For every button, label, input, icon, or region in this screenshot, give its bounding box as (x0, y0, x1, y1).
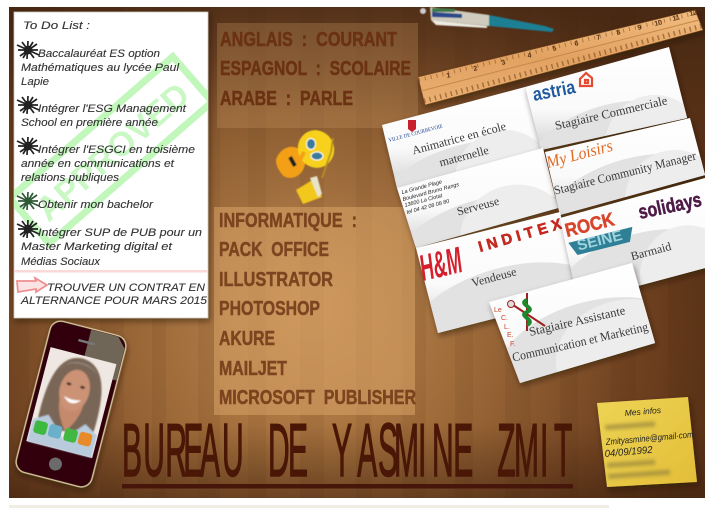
sticky note: contact info: Zmityasmine@gmail·com (604, 429, 694, 447)
item: baccalaureat: Baccalauréat ES option (38, 48, 160, 60)
logo: le clef: C. (501, 315, 508, 322)
title underline (122, 484, 573, 488)
address block: 13600 La Ciotat (404, 193, 443, 209)
card: my loisirs: Stagiaire Community Manager (553, 148, 698, 198)
item: baccalaureat: Mathématiques au lycée Paul (21, 62, 180, 74)
item: ESG: School en première année (21, 117, 158, 129)
ruler numbers: 7 (596, 34, 601, 42)
home button (48, 456, 63, 472)
item: sup de pub: Master Marketing digital et (21, 241, 173, 253)
list heading: To Do List : (23, 20, 90, 32)
panel: to do list (10, 12, 212, 318)
title (122, 409, 573, 493)
item: ESG (21, 103, 187, 129)
ruler numbers (446, 9, 698, 80)
ruler numbers: 11 (672, 14, 681, 23)
ruler numbers: 4 (527, 52, 532, 60)
title: DE (268, 409, 308, 493)
item: ESGCI (21, 144, 195, 184)
title: YASMINE (332, 409, 473, 493)
panel: languages (217, 23, 418, 128)
language: arabe: ARABE : PARLE (220, 88, 353, 110)
ruler numbers: 10 (654, 19, 663, 28)
sticky note: contact info (597, 397, 697, 487)
ruler numbers: 8 (616, 29, 621, 37)
icon: tweety usb key (276, 124, 340, 204)
card: le clef: Stagiaire Assistante (528, 303, 627, 339)
icon: ruler (418, 9, 703, 105)
skill: pack office: PACK OFFICE (219, 239, 329, 261)
card: le clef: Communication et Marketing (511, 319, 650, 365)
item: ESGCI: année en communications et (21, 158, 175, 170)
logo: h&m: H&M (416, 239, 466, 289)
card: barmaid (558, 178, 705, 291)
ruler numbers: 1 (446, 72, 451, 80)
approved stamp: APPROVED (29, 76, 197, 229)
logo: rock en seine (563, 206, 636, 256)
address block: tel 04 42 08 08 80 (406, 198, 451, 216)
ruler numbers: 3 (501, 59, 506, 67)
card: barmaid: Barmaid (629, 239, 673, 263)
ruler numbers: 6 (574, 40, 579, 48)
goal text: TROUVER UN CONTRAT EN (47, 282, 205, 294)
sticky note: contact info: 04/09/1992 (604, 445, 653, 460)
checklist star icons (17, 41, 39, 238)
approved stamp (10, 57, 212, 243)
skill heading: INFORMATIQUE : (219, 210, 357, 232)
card: serveuse: Serveuse (455, 194, 501, 219)
ruler numbers: 5 (552, 45, 557, 53)
language: anglais: ANGLAIS : COURANT (220, 29, 397, 51)
skill: photoshop: PHOTOSHOP (219, 298, 320, 320)
logo: rock en seine: ROCK (563, 209, 617, 242)
title: BUREAU (122, 409, 244, 493)
card: vendeuse (414, 212, 573, 338)
item: ESGCI: relations publiques (21, 172, 120, 184)
item: ESG: Intégrer l'ESG Management (38, 103, 187, 115)
item: bachelor: Obtenir mon bachelor (38, 199, 154, 211)
logo: my loisirs: My Loisirs (543, 136, 615, 172)
item: sup de pub: Intégrer SUP de PUB pour un (38, 227, 202, 239)
skill: illustrator: ILLUSTRATOR (219, 269, 333, 291)
skill: mailjet: MAILJET (219, 358, 287, 380)
logo: le clef: E. (507, 332, 514, 339)
title: ZMIT (497, 409, 572, 493)
address block (401, 179, 460, 216)
skill: microsoft publisher: MICROSOFT PUBLISHER (219, 387, 416, 409)
goal text: ALTERNANCE POUR MARS 2015 (20, 295, 208, 307)
item: baccalaureat: Lapie (21, 76, 49, 88)
logo: ville de courbevoie: VILLE DE COURBEVOIE (388, 123, 444, 144)
logo: rock en seine: SEINE (575, 227, 624, 254)
icon: pen (420, 7, 554, 32)
icon: smartphone with portrait (14, 319, 128, 489)
card: astria: Stagiaire Commerciale (554, 93, 669, 133)
ruler numbers: 12 (689, 9, 698, 18)
card: animatrice (381, 87, 540, 192)
card: le clef (488, 263, 658, 388)
ruler numbers: 9 (637, 24, 642, 32)
card: vendeuse: Vendeuse (470, 264, 518, 290)
card: astria (524, 47, 690, 154)
logo: le clef: L. (504, 324, 510, 331)
panel: experience cards (381, 47, 705, 388)
card: serveuse (396, 148, 559, 252)
card: animatrice: Animatrice en école (410, 119, 507, 157)
card: my loisirs (543, 118, 705, 218)
address block: Boulevard Bruno Rangs (402, 182, 460, 203)
panel: software skills (214, 207, 416, 415)
language: espagnol: ESPAGNOL : SCOLAIRE (220, 58, 411, 80)
item: ESGCI: Intégrer l'ESGCI en troisième (38, 144, 195, 156)
logo: astria: astria (531, 77, 578, 106)
logo: le clef: Le (494, 307, 502, 314)
item: sup de pub (21, 227, 202, 268)
item: baccalaureat (21, 48, 180, 88)
skill: akure: AKURE (219, 328, 275, 350)
card: animatrice: maternelle (438, 143, 490, 169)
logo: le clef (494, 293, 545, 348)
logo: le clef: F. (510, 341, 516, 348)
address block: La Grande Plage (401, 179, 443, 196)
logo: inditex: INDITEX (476, 216, 564, 256)
ruler numbers: 2 (473, 65, 478, 73)
goal text (20, 282, 208, 307)
icon: red arrow (17, 278, 47, 292)
item: sup de pub: Médias Sociaux (21, 256, 101, 268)
portrait photo (27, 350, 115, 458)
app icons (33, 420, 93, 447)
blurred private lines (605, 422, 670, 479)
sticky note: contact info: Mes infos (624, 405, 662, 418)
